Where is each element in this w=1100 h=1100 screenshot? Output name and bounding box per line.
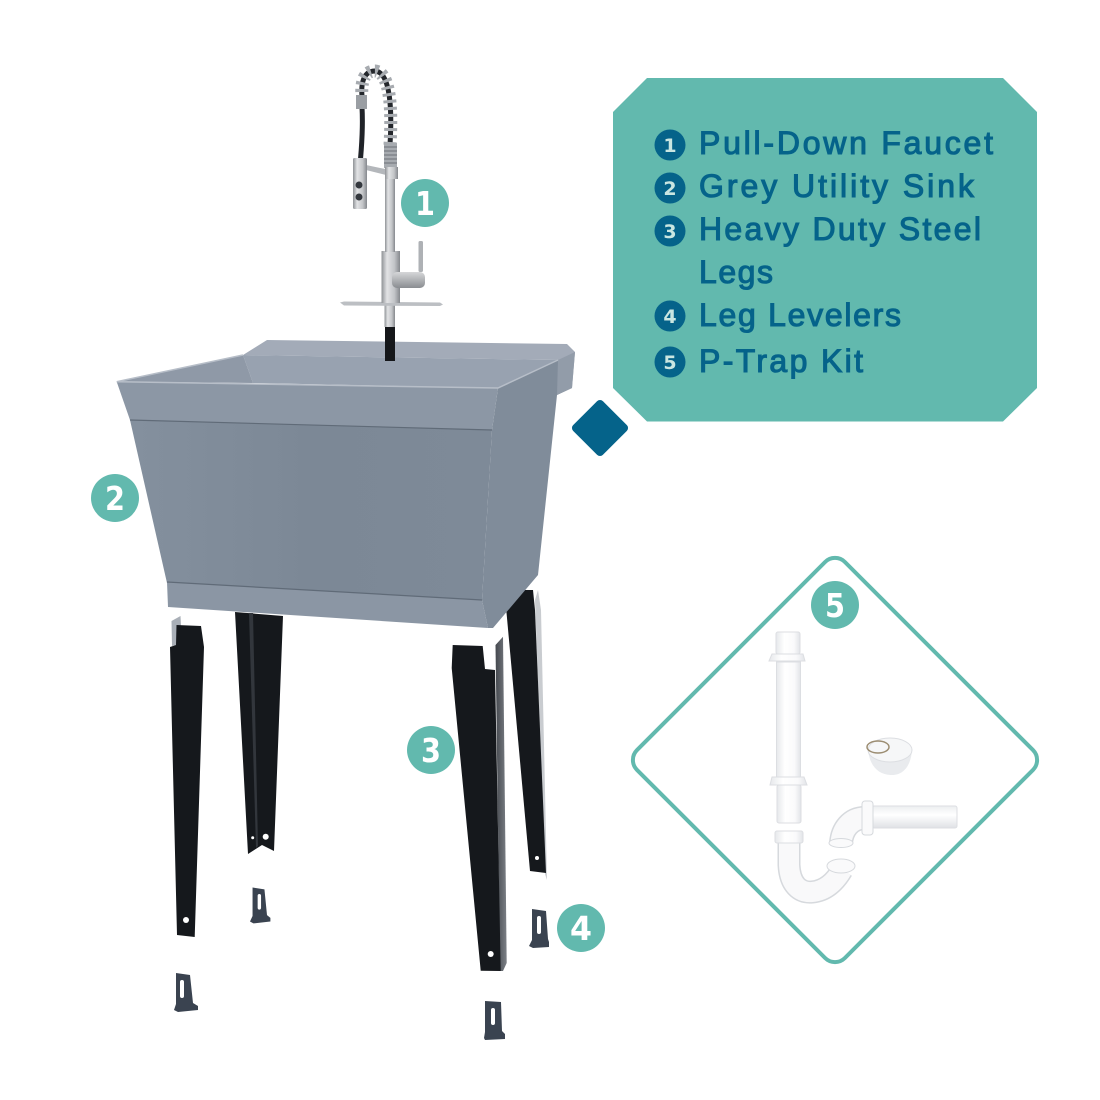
inner back wall — [243, 355, 558, 388]
item 3: heavy duty steel legs: Heavy Duty Steel — [699, 211, 981, 247]
right side wall — [482, 360, 572, 628]
hose connector — [356, 95, 367, 109]
item 5: p-trap kit: P-Trap Kit — [699, 343, 863, 379]
supply hose — [385, 325, 395, 361]
rim highlights — [117, 355, 558, 388]
deck plate — [340, 302, 443, 306]
item 2: grey utility sink: Grey Utility Sink — [699, 168, 975, 204]
stem under plate — [384, 305, 395, 327]
item 1: pull-down faucet: Pull-Down Faucet — [699, 125, 993, 161]
faucet body — [382, 251, 400, 303]
lever — [418, 241, 423, 272]
icon: blue diamond accent — [570, 398, 630, 458]
leg levelers — [174, 888, 549, 1040]
badge 1: 1 — [415, 184, 435, 223]
leveler back left — [250, 888, 270, 923]
badge 3 — [407, 726, 455, 774]
badge 5 — [811, 581, 859, 629]
item 4: leg levelers: 4 — [663, 306, 677, 328]
coil spring — [362, 71, 391, 145]
badge 3: 3 — [421, 731, 441, 770]
badge 1 — [401, 179, 449, 227]
p-trap kit parts — [769, 632, 957, 892]
badge 5: 5 — [825, 586, 845, 625]
collar stripes — [384, 147, 397, 163]
panel: parts list — [613, 78, 1037, 422]
leveler back right — [529, 909, 549, 948]
bottom band — [167, 582, 488, 628]
badge 2 — [91, 474, 139, 522]
item 5: p-trap kit: 5 — [663, 352, 677, 374]
item 3: heavy duty steel legs: Legs — [699, 254, 773, 290]
rim shadow line — [130, 420, 492, 600]
front body — [130, 420, 492, 600]
badge 4: 4 — [570, 909, 592, 948]
spray buttons — [356, 182, 362, 200]
main tube — [385, 177, 395, 252]
handle — [392, 272, 425, 288]
spray head — [353, 158, 367, 209]
faucet — [340, 71, 443, 361]
item 2: grey utility sink: 2 — [663, 178, 677, 200]
item 3: heavy duty steel legs: 3 — [663, 221, 677, 243]
back left leg — [235, 612, 283, 854]
leveler front right — [484, 1001, 505, 1040]
item 1: pull-down faucet: 1 — [663, 135, 677, 157]
lower collar — [385, 167, 398, 179]
tailpiece pipe — [769, 632, 807, 823]
inner left wall — [117, 355, 253, 383]
front rim band — [117, 382, 498, 430]
badge 2: 2 — [105, 479, 125, 518]
grey utility sink — [117, 340, 575, 628]
arm to spray head — [366, 165, 390, 176]
front right leg — [452, 637, 507, 971]
front left leg — [170, 616, 204, 937]
item 4: leg levelers: Leg Levelers — [699, 297, 901, 333]
back right leg — [506, 590, 547, 880]
item 3: heavy duty steel legs — [654, 211, 981, 290]
panel: p-trap diamond outline — [627, 552, 1043, 968]
sink stopper — [867, 738, 912, 775]
badge 4 — [557, 904, 605, 952]
coil core — [362, 71, 391, 145]
right rim edge — [557, 352, 575, 395]
j-bend pipe — [775, 831, 855, 892]
panel background — [613, 78, 1037, 422]
spring collar — [384, 143, 397, 168]
pull-down hose — [360, 107, 362, 159]
back deck — [243, 340, 575, 388]
elbow pipe — [829, 801, 957, 848]
leveler front left — [174, 973, 198, 1012]
